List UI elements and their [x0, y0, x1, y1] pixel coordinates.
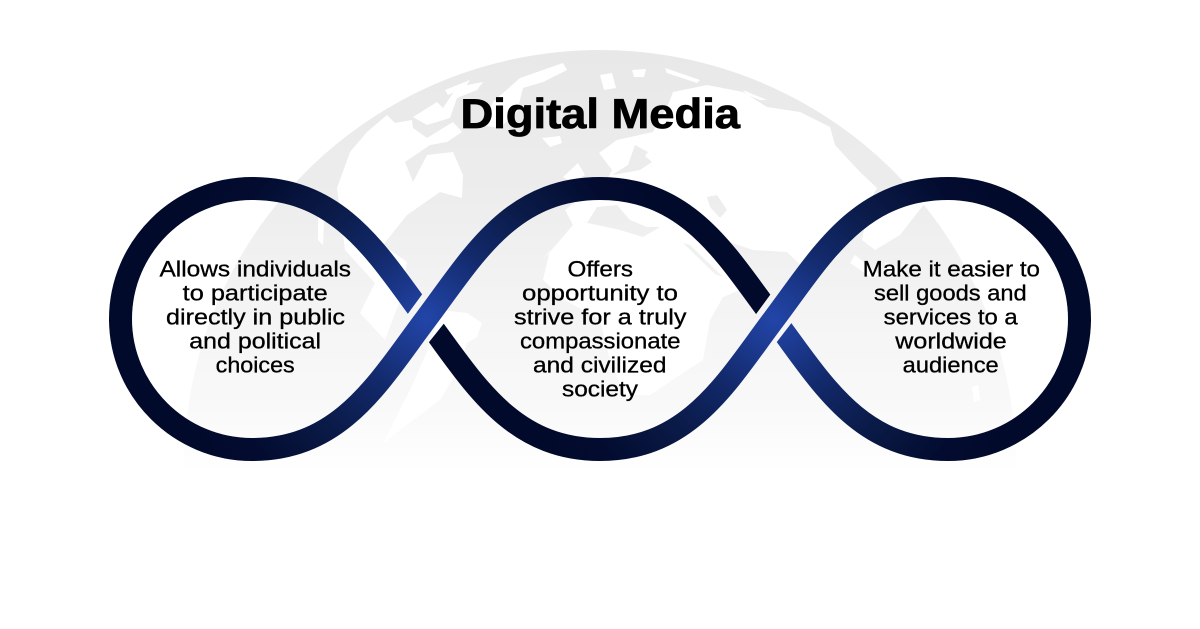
text: centre loop: opportunity to [522, 281, 678, 306]
ribbon: left loop lower strand through to centre loop top [120, 188, 774, 450]
text: right loop: audience [903, 353, 999, 378]
text: right loop: Make it easier to [863, 257, 1040, 282]
text: centre loop [514, 257, 686, 402]
text: right loop [863, 257, 1040, 378]
text: centre loop: strive for a truly [514, 305, 686, 330]
text: left loop: Allows individuals [160, 257, 351, 282]
text: centre loop: society [562, 377, 638, 402]
text: right loop: worldwide [894, 329, 1007, 354]
infinity ribbon [120, 188, 1080, 450]
text: left loop: choices [216, 353, 295, 378]
text: left loop: directly in public [166, 305, 345, 330]
globe background [197, 50, 1002, 366]
text: right loop: services to a [884, 305, 1019, 330]
text: left loop: to participate [183, 281, 328, 306]
text: left loop [160, 257, 351, 378]
title: Digital Media [460, 90, 741, 137]
text: centre loop: and civilized [533, 353, 666, 378]
text: centre loop: compassionate [520, 329, 680, 354]
text: centre loop: Offers [568, 257, 633, 282]
ribbon: right loop lower strand [774, 319, 1080, 450]
ribbon: left loop upper strand [120, 188, 426, 322]
ribbon: centre loop bottom through to right loop top [426, 188, 1080, 450]
text: left loop: and political [189, 329, 321, 354]
text: right loop: sell goods and [874, 281, 1027, 306]
